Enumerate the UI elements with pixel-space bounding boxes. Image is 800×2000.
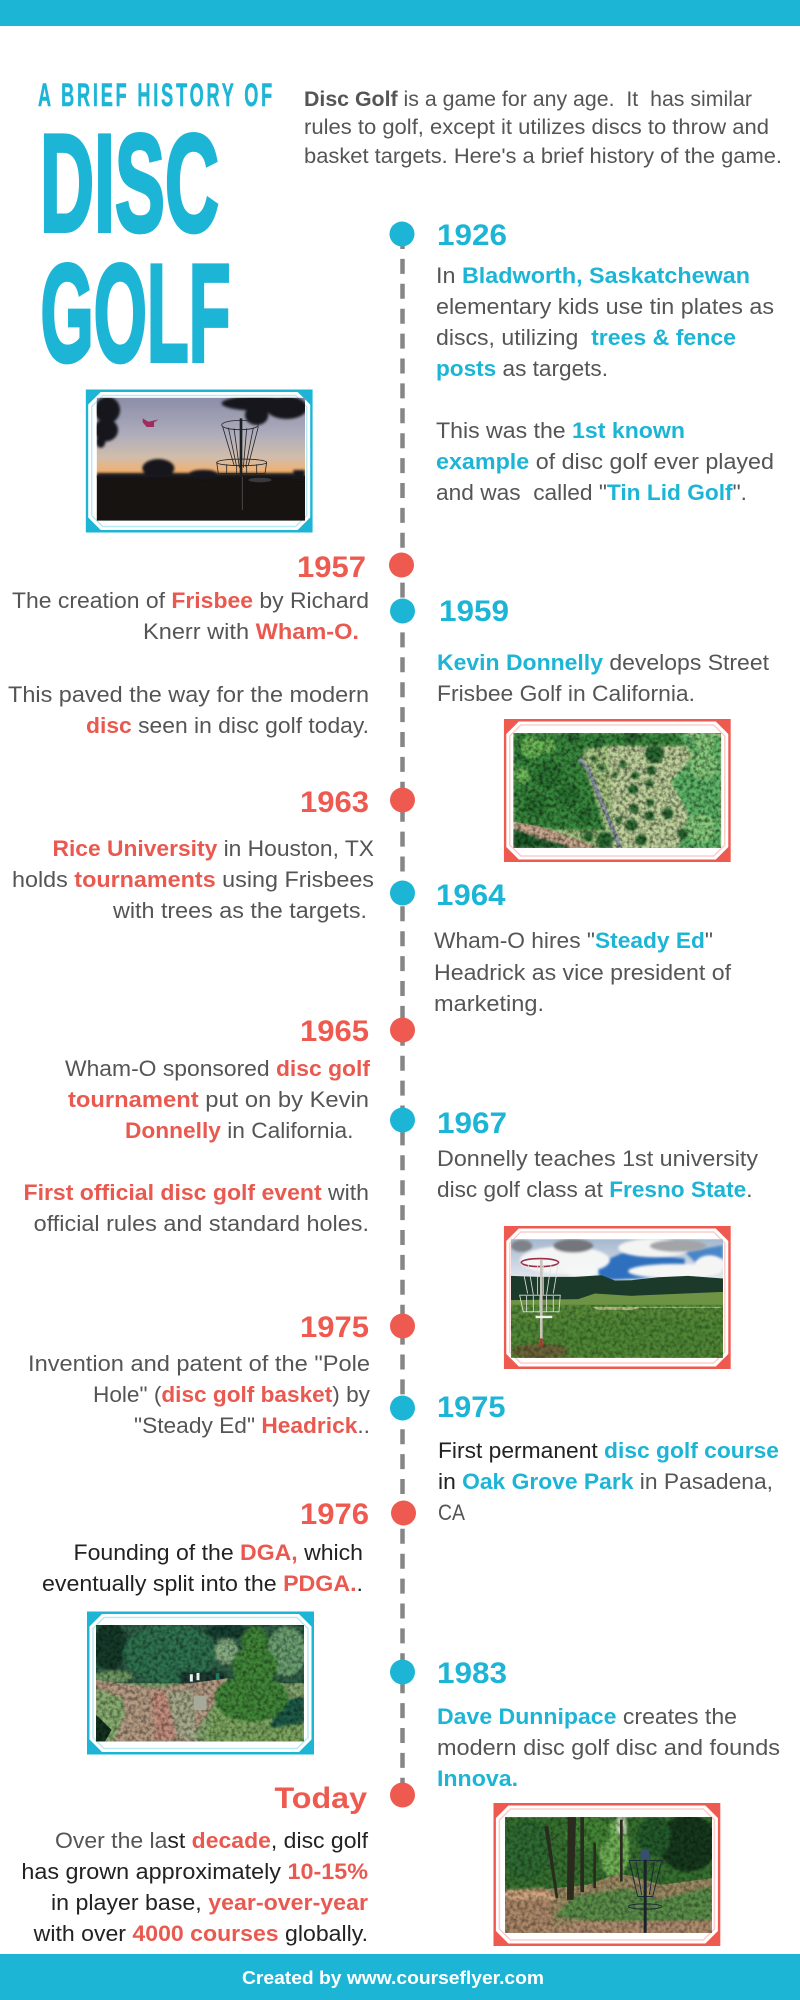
event: 1965 (24, 1015, 415, 1236)
description (434, 928, 732, 1016)
description: This was the 1st known (436, 418, 685, 443)
event: 1963 (12, 786, 415, 923)
description: in Oak Grove Park in Pasadena, (438, 1469, 773, 1494)
description: "Steady Ed" Headrick.. (134, 1413, 370, 1438)
description: official rules and standard holes. (34, 1211, 369, 1236)
description (12, 836, 374, 923)
title: GOLF (40, 236, 230, 391)
event: 1983 (390, 1657, 780, 1791)
marker (390, 880, 415, 906)
description: Founding of the DGA, which (74, 1540, 363, 1565)
marker (390, 1018, 415, 1042)
marker (390, 788, 415, 812)
description: elementary kids use tin plates as (436, 294, 774, 319)
description: Wham-O sponsored disc golf (65, 1056, 371, 1081)
photo: basket in wooded fairway (493, 1803, 720, 1946)
year: 1965 (300, 1015, 369, 1048)
event: 1926 (390, 219, 774, 505)
title (38, 77, 275, 391)
description: First permanent disc golf course (438, 1438, 779, 1463)
title kicker: A BRIEF HISTORY OF (38, 77, 275, 113)
title word: disc: DISC (40, 106, 219, 261)
year: 1957 (297, 551, 366, 584)
event: 1967 (390, 1107, 758, 1202)
year: 1976 (300, 1498, 369, 1531)
footer credit: Created by www.courseflyer.com (242, 1968, 544, 1988)
description: in player base, year-over-year (51, 1890, 368, 1915)
description: This paved the way for the modern (8, 682, 369, 707)
intro text: rules to golf, except it utilizes discs to throw and (304, 116, 769, 139)
footer bar (0, 1954, 800, 2000)
year: 1975 (437, 1391, 506, 1424)
photo: aerial view of course (504, 719, 731, 862)
description: Kevin Donnelly develops Street (437, 650, 769, 675)
description (42, 1540, 363, 1596)
top bar (0, 0, 800, 26)
marker (390, 1396, 415, 1420)
description: marketing. (434, 991, 544, 1016)
description: Over the last decade, disc golf (55, 1828, 369, 1853)
marker (390, 1660, 415, 1684)
description: discs, utilizing trees & fence (436, 325, 736, 350)
marker (390, 1782, 415, 1808)
event: 1975 course (390, 1391, 779, 1525)
description: example of disc golf ever played (436, 449, 774, 474)
intro text: basket targets. Here's a brief history of the game. (304, 145, 782, 168)
description (437, 1704, 780, 1791)
year: 1926 (437, 219, 507, 252)
description: Frisbee Golf in California. (437, 681, 695, 706)
description: Invention and patent of the "Pole (28, 1351, 370, 1376)
description: with trees as the targets. (112, 898, 367, 923)
marker (390, 1314, 415, 1338)
description: The creation of Frisbee by Richard (12, 588, 369, 613)
description: Knerr with Wham-O. (143, 619, 359, 644)
description: has grown approximately 10-15% (21, 1859, 368, 1884)
description: Dave Dunnipace creates the (437, 1704, 737, 1729)
description: with over 4000 courses globally. (33, 1921, 368, 1946)
event: 1975 patent (28, 1311, 415, 1438)
photo: players among trees (87, 1612, 314, 1754)
description: Rice University in Houston, TX (52, 836, 374, 861)
intro text: Disc Golf is a game for any age. It has similar (304, 88, 752, 111)
description: Donnelly teaches 1st university (437, 1146, 758, 1171)
year: 1967 (437, 1107, 507, 1140)
description (437, 1146, 758, 1202)
description: In Bladworth, Saskatchewan (436, 263, 750, 288)
event: 1957 (8, 551, 414, 738)
year: 1983 (437, 1657, 507, 1690)
heading: Today (274, 1782, 367, 1815)
description: Wham-O hires "Steady Ed" (434, 928, 713, 953)
description: CA (438, 1500, 465, 1525)
description (8, 588, 369, 738)
year: 1959 (439, 595, 509, 628)
photo: sunset basket with drone (86, 390, 313, 532)
description: and was called "Tin Lid Golf". (436, 480, 747, 505)
timeline dashed line (400, 234, 405, 1795)
event: 1964 (390, 879, 732, 1016)
year: 1963 (300, 786, 369, 819)
description: tournament put on by Kevin (68, 1087, 369, 1112)
description: disc seen in disc golf today. (86, 713, 369, 738)
description: Hole" (disc golf basket) by (93, 1382, 370, 1407)
marker (391, 1500, 416, 1526)
event: 1959 (390, 595, 769, 706)
description (24, 1056, 371, 1236)
intro text (304, 88, 782, 168)
description (437, 650, 769, 706)
marker (390, 598, 415, 624)
event: 1976 (42, 1498, 416, 1596)
description: Innova. (437, 1766, 518, 1791)
description: Donnelly in California. (125, 1118, 354, 1143)
description (438, 1438, 779, 1525)
description: Headrick as vice president of (434, 960, 732, 985)
event: today (21, 1782, 415, 1946)
year: 1964 (436, 879, 506, 912)
description: First official disc golf event with (24, 1180, 369, 1205)
description: posts as targets. (436, 356, 608, 381)
description (28, 1351, 370, 1438)
description (436, 263, 774, 505)
description (21, 1828, 369, 1946)
photo: basket in mountain meadow (504, 1226, 731, 1369)
marker (389, 552, 414, 578)
description: holds tournaments using Frisbees (12, 867, 374, 892)
marker (390, 222, 414, 246)
description: disc golf class at Fresno State. (437, 1177, 752, 1202)
description: modern disc golf disc and founds (437, 1735, 780, 1760)
description: eventually split into the PDGA.. (42, 1571, 363, 1596)
marker (390, 1108, 415, 1132)
year: 1975 (300, 1311, 369, 1344)
